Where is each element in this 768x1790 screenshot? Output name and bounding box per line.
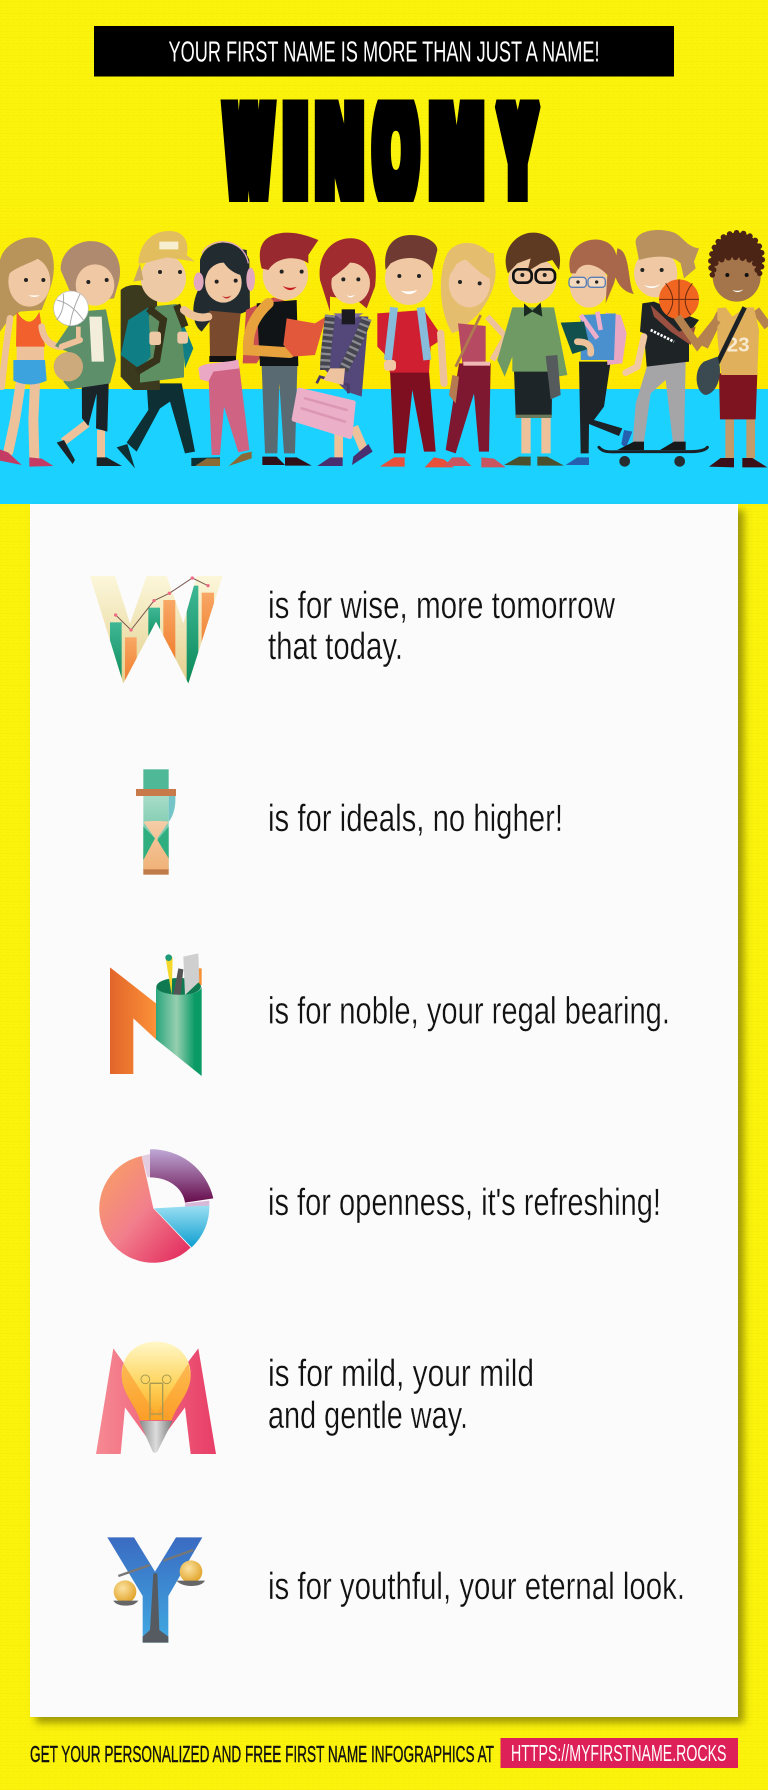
icon: M light bulb [96, 1342, 216, 1454]
person 5: boy reading a book [243, 233, 326, 466]
header banner [94, 26, 674, 76]
row N [110, 953, 670, 1076]
text: W line: that today. [268, 626, 403, 668]
text: M line: and gentle way. [268, 1395, 468, 1437]
text: I line: is for ideals, no higher! [268, 798, 563, 840]
title: WINOMY: N [316, 66, 362, 234]
person 6: girl with pink bag [294, 238, 376, 466]
title: WINOMY: I [278, 66, 312, 234]
text: Y [499, 66, 536, 234]
row Y [107, 1537, 685, 1643]
icon: O pie chart [99, 1149, 213, 1263]
person 10: girl with ponytail and tablet [561, 239, 634, 465]
person 8: blonde girl with shoulder bag [441, 243, 506, 467]
text: M line: is for mild, your mild [268, 1353, 534, 1395]
title: WINOMY: M [431, 66, 482, 234]
person 1: girl in orange top [0, 237, 75, 467]
person 3: hiker with backpack and cap [117, 231, 220, 468]
person 2: girl with volleyball [54, 241, 122, 466]
footer [30, 1738, 738, 1768]
illustration: group of twelve young people [0, 230, 768, 468]
icon: Y scales [107, 1537, 205, 1643]
person 11: skater with basketball [599, 230, 707, 467]
text: W line: is for wise, more tomorrow [268, 585, 615, 627]
person 4: girl with pink headphones [184, 242, 255, 466]
icon: N pencil holder [110, 953, 202, 1076]
row W [90, 576, 615, 686]
icon: W with bar chart [90, 576, 223, 686]
cyan floor band [0, 389, 768, 504]
row M [96, 1342, 534, 1454]
person 9: boy with glasses and folder [497, 233, 567, 466]
row O [99, 1149, 661, 1263]
row I [136, 769, 563, 875]
skateboard [599, 447, 707, 467]
title: WINOMY: W [226, 66, 272, 234]
person 12: boy in tank top and shoulder bag: 23 [727, 334, 750, 357]
title: WINOMY: O [375, 66, 417, 234]
people left half [0, 231, 376, 468]
person 7: boy in red shirt [377, 235, 454, 467]
text: O line: is for openness, it's refreshing! [268, 1182, 661, 1224]
icon: I hourglass [136, 769, 176, 875]
person 12: boy in tank top and shoulder bag [677, 233, 768, 467]
people right half [377, 230, 768, 467]
title: WINOMY [220, 100, 541, 202]
panel: white card [30, 504, 744, 1723]
